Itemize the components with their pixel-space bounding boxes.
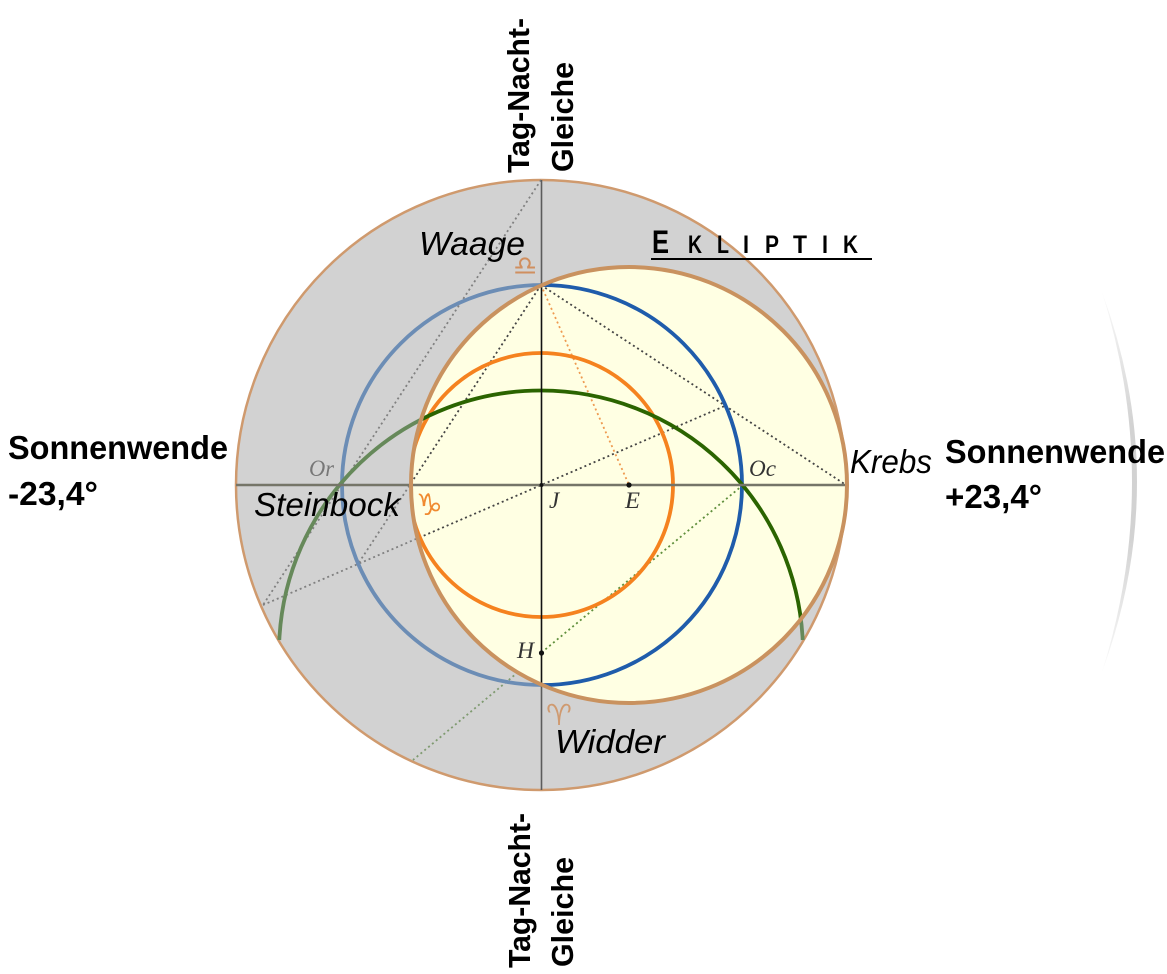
point H: [539, 650, 544, 656]
bottom equinox label: Gleiche: [545, 857, 580, 967]
label H: H: [516, 638, 535, 663]
lines and circles inside the ecliptic: [413, 283, 844, 687]
heading Ekliptik: T: [793, 231, 807, 259]
decorative grey crescent at the right edge: [1102, 292, 1137, 672]
heading Ekliptik: I: [822, 231, 828, 259]
bottom equinox label: [502, 813, 580, 968]
right solstice label: Sonnenwende: [945, 433, 1165, 470]
label Widder: Widder: [555, 723, 667, 760]
label E: E: [624, 488, 640, 513]
horizontal solstice axis: [236, 484, 846, 486]
top equinox label: Tag-Nacht-: [501, 18, 536, 173]
top equinox label: [501, 18, 580, 173]
green arc: [422, 388, 802, 619]
label Krebs: Krebs: [850, 443, 932, 480]
dotted orange line from the top point to E: [541, 285, 629, 485]
label Or: Or: [309, 456, 335, 481]
dotted construction lines: [413, 287, 844, 536]
ecliptic circle fill: [411, 267, 847, 703]
orange circle: [409, 353, 673, 617]
heading Ekliptik: L: [717, 231, 729, 259]
heading Ekliptik: K: [843, 231, 858, 259]
dotted green line through H: [541, 485, 743, 653]
outer celestial disc: [236, 180, 846, 790]
label Oc: Oc: [749, 456, 776, 481]
heading Ekliptik: K: [688, 231, 702, 259]
label Steinbock: Steinbock: [254, 486, 401, 523]
point J: [540, 483, 544, 487]
construction lines and circles outside the ecliptic (faded): [263, 180, 803, 790]
icon: Libra sign: ♎︎: [513, 251, 537, 282]
heading Ekliptik: I: [743, 231, 749, 259]
heading Ekliptik: E: [652, 224, 669, 260]
right solstice label: +23,4°: [945, 478, 1042, 515]
bottom equinox label: Tag-Nacht-: [502, 813, 537, 968]
label J: J: [549, 488, 561, 513]
label Waage: Waage: [419, 225, 525, 262]
top equinox label: Gleiche: [545, 62, 580, 172]
point E: [626, 482, 632, 488]
icon: Capricorn sign: ♑︎: [416, 488, 443, 523]
left solstice label: [8, 429, 228, 512]
left solstice label: Sonnenwende: [8, 429, 228, 466]
vertical axis inside the ecliptic: [540, 287, 542, 683]
heading Ekliptik: P: [765, 231, 779, 259]
right solstice label: [945, 433, 1165, 515]
ecliptic circle outline: [411, 267, 847, 703]
icon: Aries sign: ♈︎: [546, 698, 572, 732]
blue circle: [542, 283, 744, 687]
left solstice label: -23,4°: [8, 475, 98, 512]
heading Ekliptik: [651, 224, 872, 260]
